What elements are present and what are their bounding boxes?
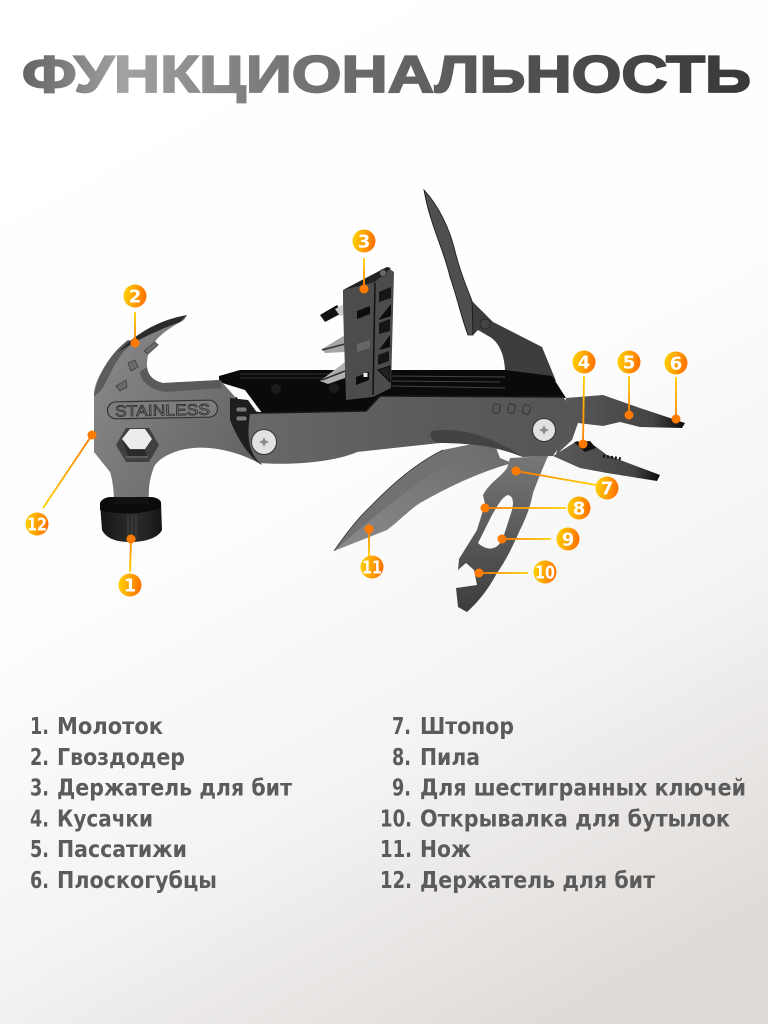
legend right column: Пила (420, 745, 480, 771)
hammer face (100, 497, 162, 542)
callout 1: hammer (118, 534, 142, 596)
STAINLESS plate (107, 400, 218, 420)
legend left column: 5. (30, 837, 49, 863)
legend left column: Гвоздодер (57, 745, 185, 771)
legend right column: Нож (420, 837, 471, 863)
legend right column: Штопор (420, 714, 514, 740)
legend left column: 6. (30, 868, 49, 894)
legend right column: 8. (392, 745, 411, 771)
legend left column: Пассатижи (57, 837, 187, 863)
legend left column: 2. (30, 745, 49, 771)
callout 8: saw: 8 (573, 498, 585, 520)
callout 7: corkscrew: 7 (601, 478, 613, 500)
callout 1: hammer: 1 (124, 576, 136, 596)
callout 2: claw: 2 (129, 286, 141, 308)
handle body (230, 396, 569, 465)
knife blade (334, 440, 512, 551)
callout 6: flat-nose pliers: 6 (670, 354, 682, 374)
legend left column: 4. (30, 806, 49, 832)
callout 3: bit holder: 3 (358, 232, 370, 252)
callout 9: hex slot (498, 528, 580, 550)
legend right column: 7. (392, 714, 411, 740)
legend right column (380, 714, 746, 894)
handle grip marks (236, 403, 531, 421)
legend right column: 11. (380, 837, 412, 863)
left pivot screw (252, 430, 276, 454)
legend right column: 9. (392, 776, 411, 802)
callout 12: bit holder in head (26, 430, 96, 536)
black tool frame (219, 370, 566, 413)
callout 11: knife: 11 (362, 558, 382, 578)
callout 3: bit holder (352, 230, 376, 294)
hexagonal socket (116, 428, 159, 462)
legend left column (30, 714, 293, 894)
callout 4: wire cutter: 4 (578, 352, 590, 374)
callout 2: claw (124, 284, 146, 348)
callout 10: bottle opener (474, 560, 556, 584)
callout 8: saw (480, 496, 590, 520)
legend left column: Молоток (57, 714, 163, 740)
callout 6: flat-nose pliers (664, 352, 688, 424)
claw grooves (116, 342, 158, 391)
right pivot screw (532, 418, 556, 442)
title: ФУНКЦИОНАЛЬНОСТЬ (22, 46, 751, 104)
legend left column: 1. (30, 714, 49, 740)
callout 4: wire cutter (572, 350, 596, 448)
callout 5: pliers (618, 350, 640, 420)
legend left column: 3. (30, 776, 49, 802)
pliers lower jaw with wire cutter (553, 441, 660, 481)
callout 11: knife (360, 524, 384, 578)
pliers upper jaw (556, 395, 685, 455)
legend left column: Плоскогубцы (57, 868, 217, 894)
callout 7: corkscrew (512, 466, 618, 500)
multitool illustration (94, 190, 685, 612)
callout 10: bottle opener: 10 (535, 562, 555, 584)
legend right column: Держатель для бит (420, 868, 656, 894)
callout 9: hex slot: 9 (562, 530, 574, 550)
bit holder with bits (320, 267, 394, 400)
legend right column: 12. (380, 868, 412, 894)
STAINLESS plate: STAINLESS (115, 402, 210, 420)
legend right column: 10. (380, 806, 412, 832)
callout 5: pliers: 5 (623, 352, 635, 374)
callout 12: bit holder in head: 12 (27, 514, 47, 536)
fold-out spatula blade (424, 190, 556, 381)
legend right column: Открывалка для бутылок (420, 806, 730, 832)
legend left column: Кусачки (57, 806, 153, 832)
multi-function arm with saw, hex slot and bottle opener (456, 456, 548, 612)
legend left column: Держатель для бит (57, 776, 293, 802)
hammer head with claw (94, 315, 262, 504)
